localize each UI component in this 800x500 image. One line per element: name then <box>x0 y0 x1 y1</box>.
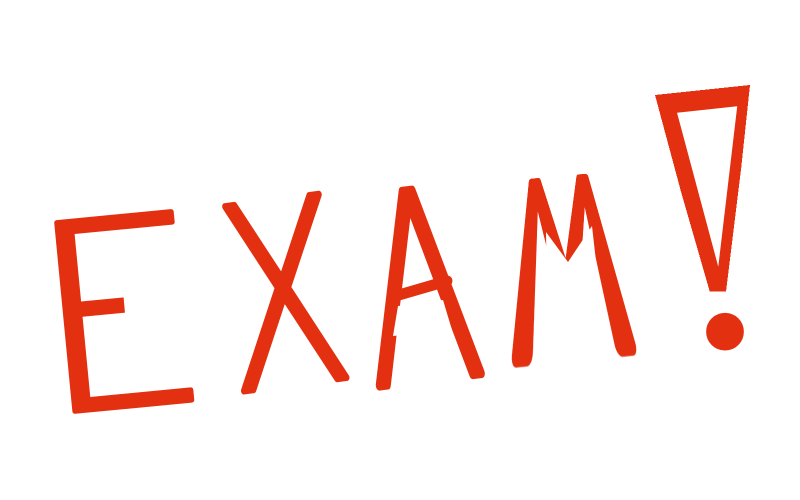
letter A: A <box>345 134 495 448</box>
letter X: X <box>202 144 365 453</box>
exclamation dot: • <box>687 259 763 411</box>
title: hand-lettered word EXAM <box>18 134 681 476</box>
exclamation stem hollow centre: ▼ <box>673 47 750 293</box>
letter E: E <box>18 158 222 476</box>
exclamation mark <box>655 47 763 411</box>
exclamation stem outline <box>655 85 750 292</box>
